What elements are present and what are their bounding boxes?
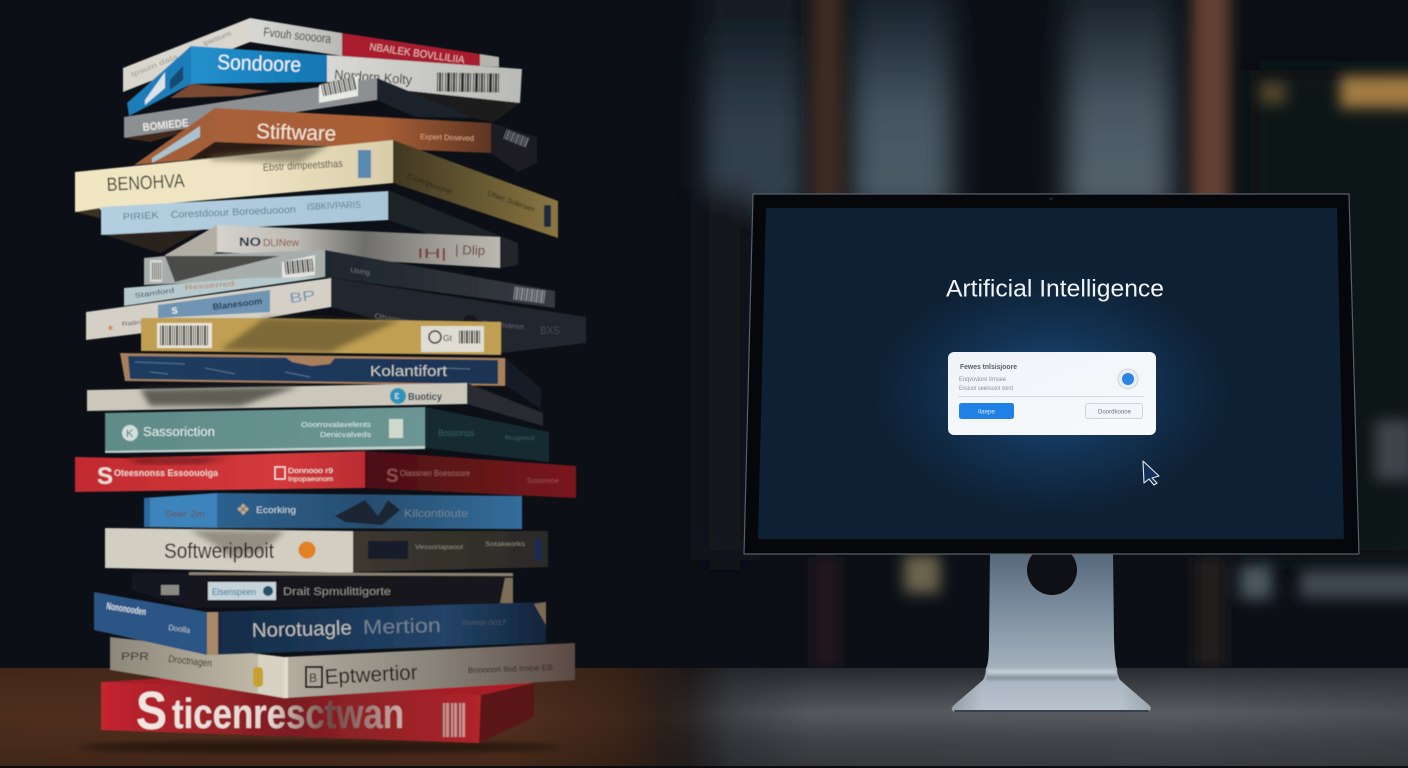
box 10: white box with blue label: BP (288, 287, 316, 306)
box 15: red Stoolbar box: S (97, 463, 113, 490)
box 17: white Softweripboit box (105, 528, 548, 573)
box 18: black Drait Spmulittigorte box (132, 572, 513, 608)
box 19: blue and navy Norotuagle Mertion box: Norotuagle (252, 617, 352, 642)
box 14: teal Sassoriction box: Sassoriction (143, 425, 215, 439)
label: Nordorn Kolty: Nordorn Kolty (334, 67, 413, 87)
box 10: white box with blue label: BXS (540, 325, 560, 337)
box 16: blue Ecorking box: ❖ (236, 502, 250, 519)
box 21: red Sticenresctwan box at the base: ticenresctwan (172, 690, 404, 737)
box 10: white box with blue label (86, 278, 586, 353)
box 10: white box with blue label: Ratings (122, 319, 150, 328)
box 14: teal Sassoriction box: Bossonus (438, 428, 474, 438)
label: Stiftware: Stiftware (256, 120, 337, 146)
box 7: white box in shadow: DLINew (263, 238, 300, 249)
icon: mouse cursor arrow (1143, 461, 1159, 485)
monitor stand (952, 545, 1151, 712)
box 4: brown Stiftware box: Expert Doseved (420, 132, 474, 143)
box 18: black Drait Spmulittigorte box: Elsenspeen (212, 587, 256, 597)
box 10: white box with blue label: Oharprae (374, 313, 414, 326)
box 6: pale blue box: Corestdoour Boroeduooon (171, 205, 296, 221)
box 20: cream Eptwertior box (110, 637, 575, 698)
box 19: blue and navy Norotuagle Mertion box: Nononooden (106, 601, 147, 618)
dialog body text: Enqvoviore tirnsee (959, 377, 1007, 383)
box 17: white Softweripboit box: Softweripboit (164, 540, 274, 563)
book stack (75, 18, 586, 743)
box 5: cream BENOHVA box: Ebstr dimpeetsthas (263, 158, 343, 174)
radio control (1118, 369, 1138, 389)
box 8: white and dark barcode box (144, 250, 555, 308)
dialog body text (959, 377, 1013, 392)
box 13: white Ebuolicy box: Buoticy (408, 392, 442, 403)
divider (958, 396, 1144, 398)
box 13: white Ebuolicy box (87, 383, 543, 426)
box 15: red Stoolbar box: Soooreoe (527, 478, 559, 485)
box 4: brown Stiftware box (134, 108, 537, 172)
box 20: cream Eptwertior box: Booooon Ilod Iroioe EB (468, 663, 553, 675)
box 7: white box in shadow: | Dlip (455, 242, 485, 258)
box 16: blue Ecorking box: Kilcontioute (404, 508, 468, 520)
box 1: grey and red top box: Ipsessums (202, 30, 233, 48)
box 21: red Sticenresctwan box at the base: S (136, 681, 167, 741)
primary button (959, 403, 1014, 419)
box 17: white Softweripboit box: Vessoriapaoul (415, 545, 463, 551)
monitor (744, 194, 1359, 712)
barcode (437, 82, 499, 83)
box 16: blue Ecorking box: Seer 2m (165, 509, 205, 519)
box 15: red Stoolbar box: Oteesnonss Essoouoiga (114, 468, 219, 479)
box 9: pale edge box: Stamford (134, 287, 175, 300)
box 9: pale edge box: Resserred (185, 281, 235, 292)
label: Sondoore: Sondoore (217, 51, 302, 77)
box 5: cream BENOHVA box: Ofaer Solersen (486, 190, 536, 214)
box 15: red Stoolbar box: Donnooo r9 (288, 468, 333, 475)
box 3: grey box with barcode (124, 76, 474, 142)
box 6: pale blue box (101, 190, 518, 265)
box 1: grey and red top box: Ipsum data (130, 54, 179, 79)
box 1: grey and red top box: NBAILEK BOVLLILIIA (369, 41, 465, 66)
dialog heading: Fewes tnlsisjoore (960, 364, 1017, 371)
box 6: pale blue box: ISBKIVPARIS (307, 200, 361, 213)
box 1: grey and red top box: Fvouh soooora (263, 25, 332, 46)
box 7: white box in shadow: NO (239, 235, 261, 249)
box 19: blue and navy Norotuagle Mertion box: Doolla (168, 623, 191, 635)
box 16: blue Ecorking box: Ecorking (256, 505, 296, 516)
box 7: white box in shadow: IH| (417, 245, 447, 261)
box 12: worn navy box Kolantifort: Kolantifort (370, 364, 447, 380)
monitor screen (758, 208, 1344, 539)
box 20: cream Eptwertior box: Eptwertior (324, 661, 418, 689)
box 5: cream BENOHVA box: Compoure (405, 171, 454, 197)
secondary button: Doordkoooe (1098, 410, 1132, 416)
box 6: pale blue box: PIRIEK (123, 210, 160, 223)
primary button: Ilaepe (978, 410, 996, 416)
box 14: teal Sassoriction box: K (126, 428, 134, 440)
monitor frame (744, 194, 1359, 554)
box 2: blue Sondoore box (127, 46, 522, 122)
box 17: white Softweripboit box: Sotakeorks (485, 542, 525, 548)
box 12: worn navy box Kolantifort (120, 353, 541, 409)
box 14: teal Sassoriction box: Denicvalveds (320, 432, 372, 439)
box 8: white and dark barcode box: Using (350, 267, 371, 277)
box 21: red Sticenresctwan box at the base (101, 676, 534, 743)
box 18: black Drait Spmulittigorte box: Drait Spmulittigorte (283, 586, 391, 598)
box 10: white box with blue label: Soolmaren (482, 320, 524, 331)
box 10: white box with blue label: Blanesoom (212, 296, 263, 312)
box 10: white box with blue label: ◈ (107, 324, 114, 332)
box 11: yellow box with barcodes: Gt (443, 334, 453, 343)
box 5: cream BENOHVA box (75, 140, 558, 238)
box 15: red Stoolbar box: Oiassnen Boesosore (400, 468, 470, 478)
box 1: grey and red top box (123, 18, 499, 92)
secondary button (1086, 404, 1142, 418)
dialog card (948, 352, 1156, 435)
box 14: teal Sassoriction box: Rrogresor (505, 436, 535, 442)
box 19: blue and navy Norotuagle Mertion box: Mertion (363, 615, 441, 639)
box 19: blue and navy Norotuagle Mertion box: Somon 0017 (462, 620, 506, 627)
box 7: white box in shadow (165, 225, 518, 282)
box 20: cream Eptwertior box: B (309, 671, 317, 685)
box 19: blue and navy Norotuagle Mertion box (94, 592, 546, 655)
box 13: white Ebuolicy box: Ɛ (394, 392, 400, 401)
box 20: cream Eptwertior box: Droctnagen (168, 654, 213, 670)
box 3: grey box with barcode: BOMIEDE (142, 117, 189, 134)
table surface: wood fading to grey (0, 668, 1408, 768)
title: Artificial Intelligence: Artificial Intelligence (946, 276, 1164, 302)
box 9: pale edge box (124, 277, 325, 306)
box 15: red Stoolbar box: S (386, 466, 399, 487)
box 15: red Stoolbar box: Inpopaeonom (288, 477, 333, 483)
box 10: white box with blue label: S (171, 305, 178, 316)
box 15: red Stoolbar box (75, 451, 576, 498)
box 14: teal Sassoriction box (105, 407, 549, 462)
box 16: blue Ecorking box (144, 493, 522, 529)
box 14: teal Sassoriction box: Ooorrovalavelents (301, 422, 372, 429)
label: BENOHVA: BENOHVA (106, 171, 185, 196)
box 20: cream Eptwertior box: PPR (121, 651, 149, 663)
dialog body text: Ensiuor oeensoiot noird (959, 386, 1013, 392)
box 11: yellow box with barcodes (141, 318, 501, 355)
